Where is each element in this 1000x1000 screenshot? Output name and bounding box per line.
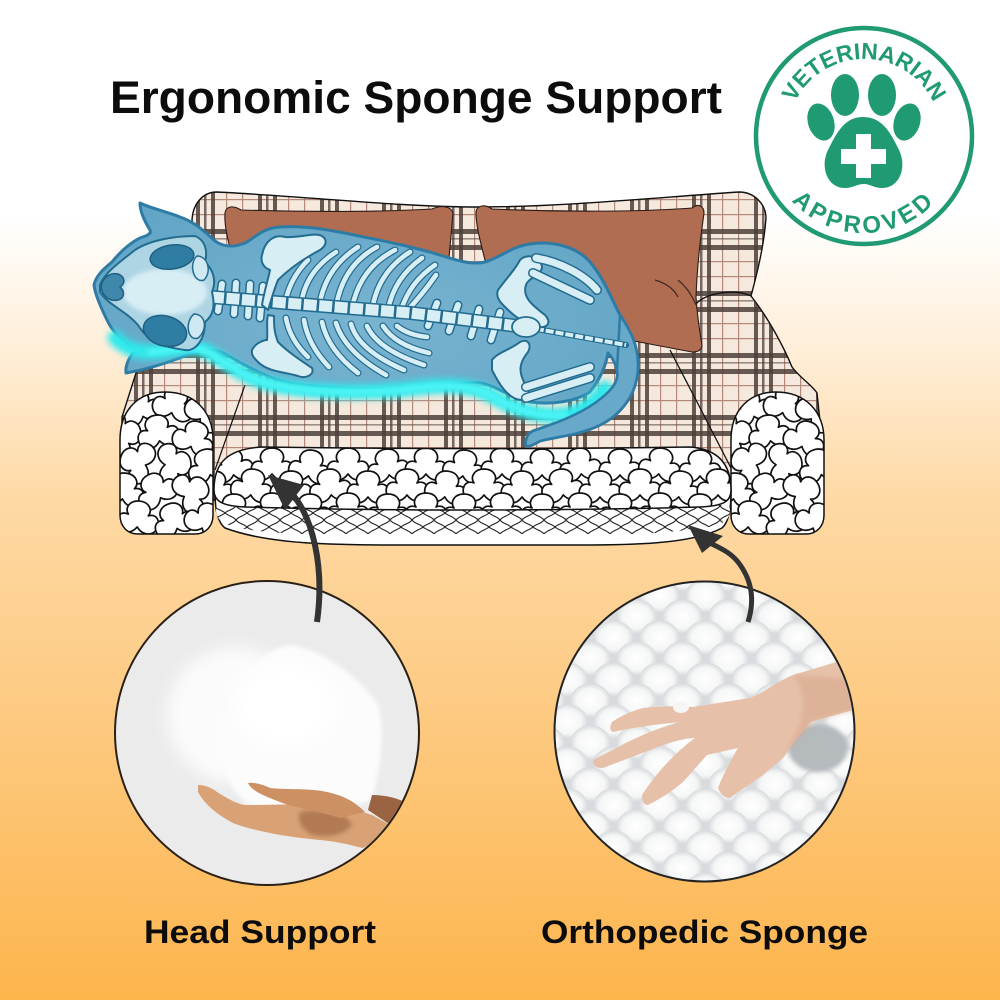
right arm cushion — [712, 382, 844, 543]
cat body — [94, 203, 638, 446]
far arm — [368, 795, 402, 824]
pelvis — [512, 317, 540, 337]
skull — [100, 236, 214, 350]
badge: veterinarian approved — [754, 26, 974, 246]
spine — [211, 283, 626, 345]
palm and lower fingers — [198, 785, 392, 848]
right pillow — [476, 206, 704, 352]
hand and arm — [593, 655, 860, 805]
title: Ergonomic Sponge Support — [110, 72, 722, 123]
cotton ball — [167, 645, 382, 809]
thumb — [248, 783, 365, 818]
hand shadow — [788, 724, 848, 772]
label: head support: Head Support — [144, 914, 376, 950]
foam bump between fingers — [673, 706, 689, 713]
panel: orthopedic sponge photo — [554, 582, 860, 882]
seat outline line — [215, 385, 245, 470]
skull rear lobes — [188, 256, 208, 339]
eye socket upper — [149, 242, 195, 272]
hand shading — [788, 673, 852, 752]
left pillow — [225, 207, 453, 258]
arrow: to orthopedic sponge — [688, 525, 752, 622]
ribs — [285, 247, 436, 375]
leg bones — [526, 258, 597, 398]
seat cushion outline — [214, 447, 731, 510]
pillow creases — [655, 280, 696, 305]
cyan spine support glow — [115, 338, 605, 416]
sofa back and arms in plaid — [122, 192, 822, 500]
cat skeleton x-ray — [94, 203, 638, 446]
badge text: veterinarian: VETERINARIAN — [780, 43, 946, 101]
foam scale texture — [216, 505, 730, 534]
hip bones — [492, 256, 548, 400]
label: orthopedic sponge: Orthopedic Sponge — [541, 914, 868, 950]
left arm cushion — [101, 382, 233, 543]
sofa — [101, 192, 844, 545]
eye socket lower — [140, 311, 190, 351]
seat cushion — [214, 448, 730, 510]
right arm outline — [670, 292, 751, 470]
panel: head support photo — [115, 581, 419, 885]
tail redraw over glow — [526, 315, 638, 446]
skull highlight — [123, 269, 207, 315]
icon: paw with cross — [803, 74, 925, 188]
nose cavity — [101, 274, 124, 300]
shoulder blades — [252, 235, 326, 377]
badge text: approved: APPROVED — [792, 193, 930, 234]
foam base layer — [215, 490, 731, 545]
palm shadow — [299, 810, 352, 836]
arrow: to head support cushion — [268, 475, 319, 622]
